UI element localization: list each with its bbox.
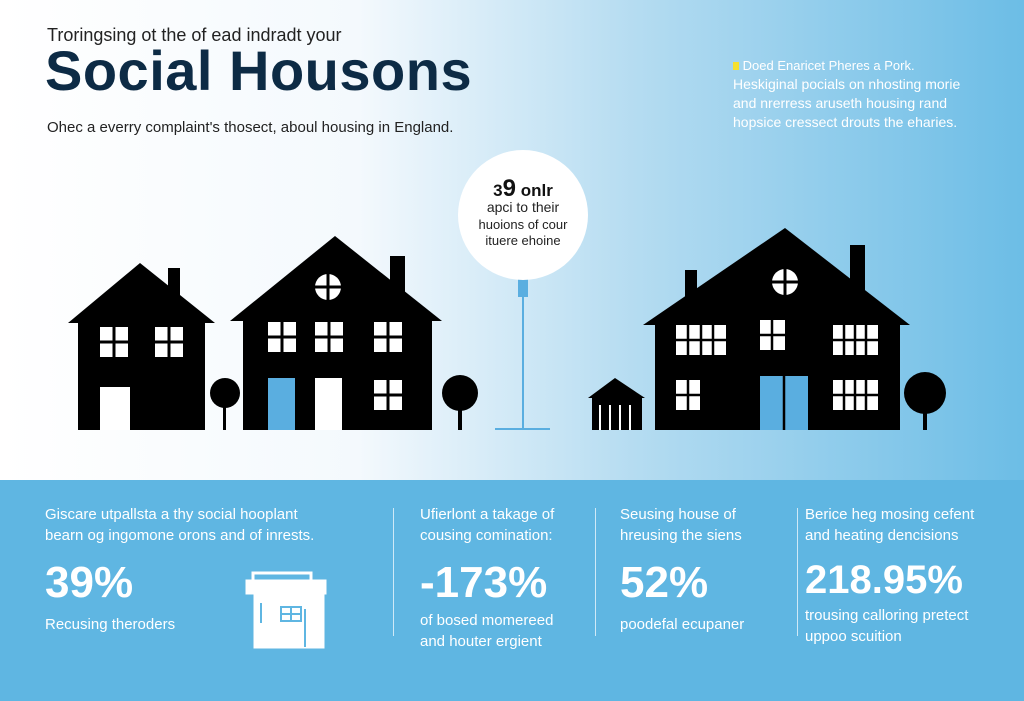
- stat 3: poodefal ecupaner: [620, 616, 744, 633]
- stat 2: cousing comination:: [420, 527, 553, 544]
- stat 4: [805, 506, 974, 645]
- stat 4: and heating dencisions: [805, 527, 958, 544]
- intro text: Ohec a everry complaint's thosect, aboul housing in England.: [47, 119, 453, 136]
- stat 4: Berice heg mosing cefent: [805, 506, 974, 523]
- stat 1: [45, 506, 326, 648]
- stat 2: [420, 506, 554, 650]
- stat 2: of bosed momereed: [420, 612, 553, 629]
- stat 1: Giscare utpallsta a thy social hooplant: [45, 506, 298, 523]
- title: Social Housons: [45, 39, 472, 102]
- stat 1: Recusing theroders: [45, 616, 175, 633]
- stat 2: -173%: [420, 558, 547, 607]
- houses scene: [68, 150, 946, 430]
- stat 3: hreusing the siens: [620, 527, 742, 544]
- stat 4: trousing calloring pretect: [805, 607, 968, 624]
- balloon callout: ituere ehoine: [485, 233, 561, 248]
- right note: Doed Enaricet Pheres a Pork.: [743, 58, 915, 73]
- house 3: [643, 228, 910, 430]
- tree 1: [210, 378, 240, 430]
- stat 3: 52%: [620, 558, 708, 607]
- house 1: [68, 263, 215, 430]
- stat 1: bearn og ingomone orons and of inrests.: [45, 527, 314, 544]
- balloon callout: [458, 150, 588, 429]
- stats panel: uppoo scuition: [805, 628, 902, 645]
- stat 3: Seusing house of: [620, 506, 736, 523]
- stat 2: Ufierlont a takage of: [420, 506, 554, 523]
- right note: [733, 58, 960, 130]
- balloon callout: huoions of cour: [479, 217, 568, 232]
- tree 3: [904, 372, 946, 430]
- house 2: [230, 236, 442, 430]
- tree 2: [442, 375, 478, 430]
- stats panel: [0, 480, 1024, 701]
- subtitle: Troringsing ot the of ead indradt your: [47, 25, 342, 45]
- right note: Heskiginal pocials on nhosting morie: [733, 76, 960, 92]
- stat 3: [620, 506, 744, 633]
- balloon callout: apci to their: [487, 199, 560, 215]
- stat 4: 218.95%: [805, 558, 963, 602]
- stat 1: 39%: [45, 558, 133, 607]
- right note: and nrerress aruseth housing rand: [733, 95, 947, 111]
- right note: hopsice cressect drouts the eharies.: [733, 114, 957, 130]
- icon: building: [246, 572, 326, 648]
- balloon callout: 39 onlr: [493, 175, 553, 202]
- stats panel: and houter ergient: [420, 633, 542, 650]
- small house: [588, 378, 645, 430]
